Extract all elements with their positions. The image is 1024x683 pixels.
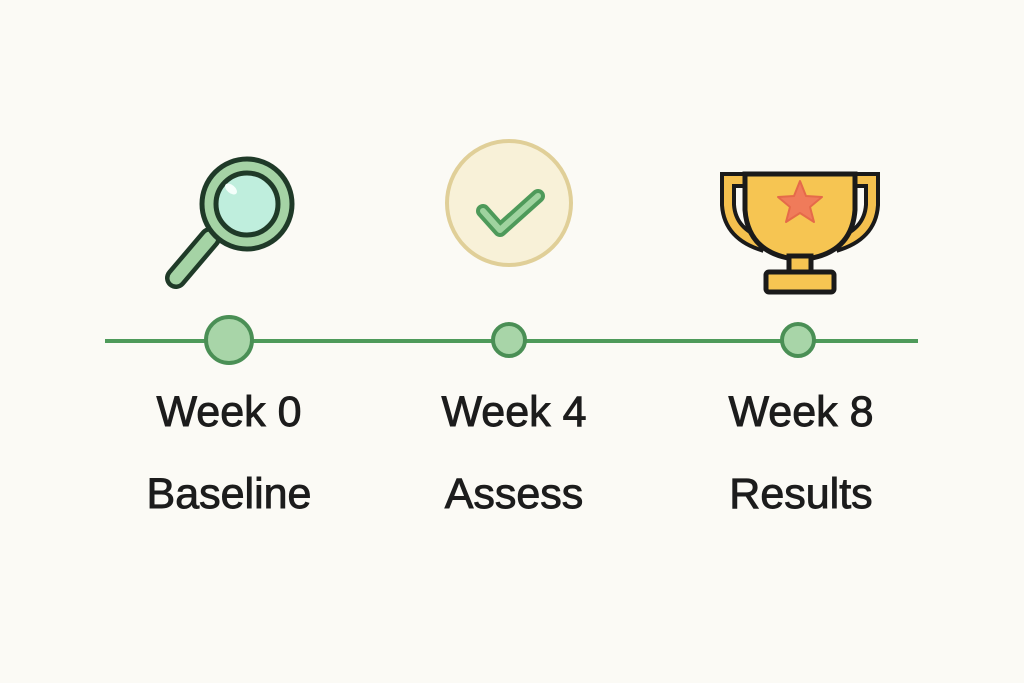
label: Week 4 Assess: Assess <box>445 470 583 518</box>
icon: trophy <box>728 174 872 292</box>
timeline <box>105 317 918 363</box>
milestone: week 4 <box>493 324 525 356</box>
milestone: week 0 <box>206 317 252 363</box>
label: Week 4 Assess <box>442 388 586 518</box>
label: Week 0 Baseline <box>147 388 311 518</box>
label: Week 8 Results: Week 8 <box>728 388 874 436</box>
label: Week 0 Baseline: Week 0 <box>156 388 302 436</box>
icon: magnifying glass <box>176 159 292 278</box>
icon: check circle <box>447 141 571 265</box>
label: Week 4 Assess: Week 4 <box>442 388 586 436</box>
milestone: week 8 <box>782 324 814 356</box>
label: Week 8 Results <box>728 388 874 518</box>
label: Week 8 Results: Results <box>729 470 873 518</box>
label: Week 0 Baseline: Baseline <box>147 470 311 518</box>
